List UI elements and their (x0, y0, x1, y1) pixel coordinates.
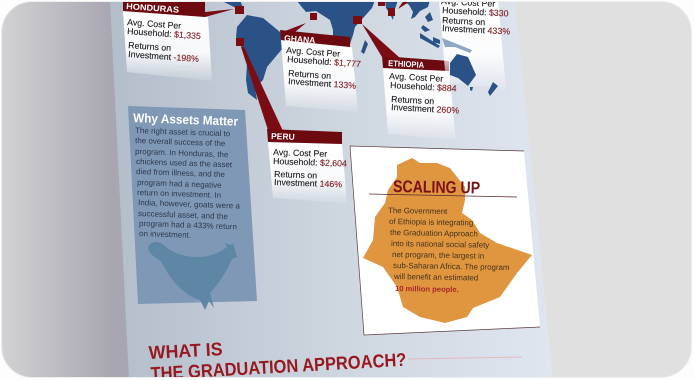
panel: Ethiopia: Avg. Cost Per (389, 71, 444, 84)
panel: Honduras: HONDURAS (126, 1, 180, 15)
body text: successful asset, and the (138, 209, 229, 221)
Asia west (385, 2, 398, 20)
map: Oceania (442, 38, 498, 96)
panel: India (378, 0, 510, 90)
body text (135, 126, 241, 240)
body text: the overall success of the (135, 136, 226, 148)
poster page (110, 0, 553, 380)
panel: Scaling Up (350, 146, 540, 335)
heading: SCALING UP (393, 177, 480, 198)
panel: Peru: Household: $2,604 (273, 156, 347, 169)
panel: Honduras: Investment -198% (128, 49, 199, 64)
body text: died from illness, and the (136, 167, 226, 179)
panel: Ghana: Investment 133% (288, 76, 357, 91)
world map (220, 0, 440, 100)
body text: return on investment. In (137, 188, 221, 200)
Madagascar (361, 40, 368, 54)
panel: Peru (236, 38, 347, 203)
pointer Peru (241, 47, 283, 131)
Australia (450, 54, 476, 86)
panel: Peru: Investment 146% (274, 177, 342, 189)
Africa (296, 0, 375, 47)
body text: 10 million people. (395, 284, 459, 294)
body text: program had a 433% return (139, 219, 237, 231)
panel: India: Returns on (442, 15, 485, 27)
Borneo (433, 37, 440, 44)
panel: Ethiopia: Returns on (391, 94, 434, 106)
body text: net program, the largest in (392, 250, 484, 261)
marker Ghana (310, 13, 317, 20)
panel: Ghana (280, 13, 361, 112)
panel: Ethiopia: ETHIOPIA (388, 58, 424, 70)
heading: Why Assets Matter (133, 111, 238, 129)
body text: of Ethiopia is integrating (389, 217, 473, 227)
Central America (224, 2, 242, 8)
Japan (425, 12, 433, 22)
panel: Honduras: Returns on (128, 40, 172, 53)
marker Honduras (235, 6, 244, 14)
body text: The Government (388, 206, 448, 216)
body text: into its national social safety (391, 239, 489, 250)
panel: Ghana: GHANA (284, 33, 316, 45)
pale Indonesian islands (442, 38, 472, 53)
panel: Ghana: Returns on (288, 68, 332, 81)
panel: Honduras (123, 0, 244, 81)
Tasmania (470, 87, 473, 91)
marker Ethiopia (353, 16, 362, 24)
panel: India: Investment 433% (442, 23, 510, 37)
body text: will benefit an estimated (393, 272, 478, 282)
body text: program. In Honduras, the (135, 147, 229, 159)
marker India (388, 8, 395, 16)
icon: chicken (148, 242, 237, 310)
panel: Honduras: Household: $1,335 (127, 26, 201, 41)
panel: Why Assets Matter (128, 106, 257, 310)
body text: the Graduation Approach (390, 228, 478, 239)
Asia east (406, 2, 430, 19)
Southeast Asia (421, 25, 430, 32)
body text: program had a negative (137, 178, 222, 190)
panel: Peru: Avg. Cost Per (273, 147, 327, 159)
body text: India, however, goats were a (138, 198, 241, 211)
body text: The right asset is crucial to (135, 126, 231, 138)
body text: chickens used as the asset (136, 157, 233, 169)
body text: on investment. (139, 229, 191, 240)
panel: Honduras: Avg. Cost Per (127, 17, 182, 31)
panel: Ghana: Avg. Cost Per (286, 45, 341, 59)
panel: Ethiopia: Household: $884 (390, 80, 457, 93)
marker Peru (236, 38, 244, 46)
body text (388, 206, 510, 294)
panel: Ghana: Household: $1,777 (287, 54, 361, 69)
South America (236, 15, 290, 100)
Sumatra and Java (420, 33, 440, 48)
New Zealand (488, 82, 498, 96)
heading: What is the Graduation Approach: WHAT IS (148, 338, 223, 363)
panel: Ethiopia (353, 16, 459, 140)
panel: Peru: Returns on (274, 169, 317, 181)
panel: Ethiopia: Investment 260% (391, 102, 459, 116)
panel: India: Household: $330 (442, 5, 509, 18)
body text: sub-Saharan Africa. The program (393, 261, 510, 272)
panel: Peru: PERU (271, 131, 295, 142)
map: Ethiopia (363, 158, 532, 323)
